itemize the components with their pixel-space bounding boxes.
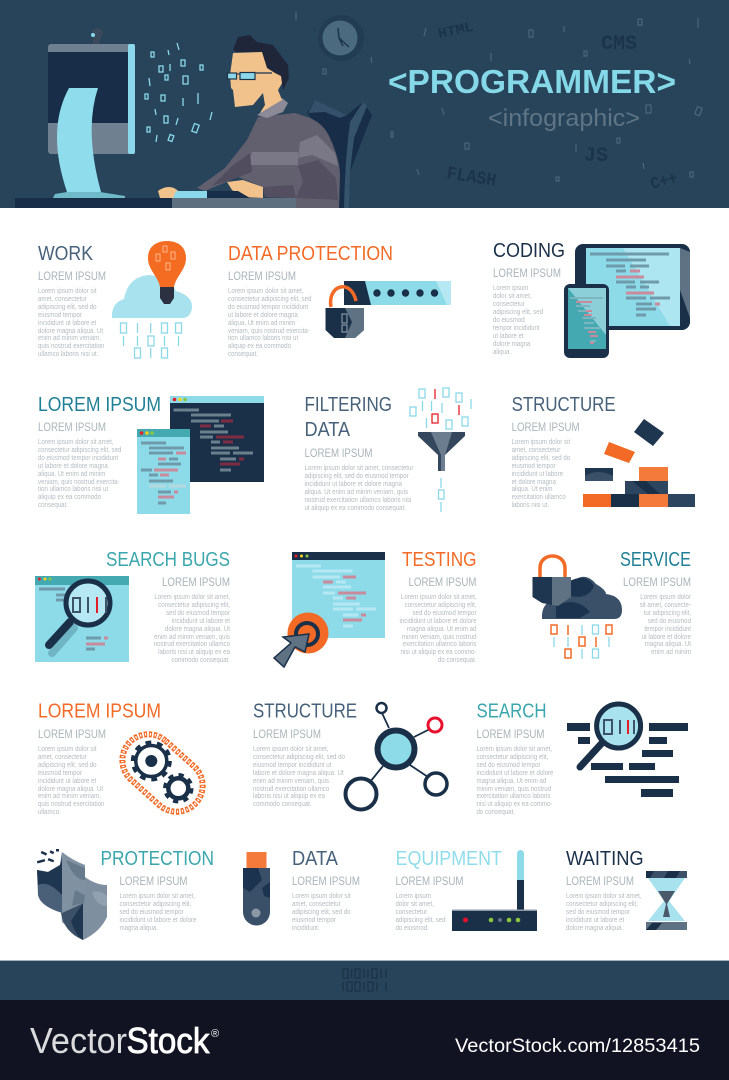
icon: hourglass [646, 871, 687, 930]
icon: usb stick [243, 852, 270, 926]
body text: aliqua. Ut enim ad minim veniam, quis [304, 489, 409, 496]
icon: binary code [343, 969, 386, 991]
body text: incididunt ut labore et dolore magna [304, 481, 402, 488]
body text: laboris nisi ut aliquip ex ea [158, 649, 230, 656]
heading: EQUIPMENT [396, 847, 502, 870]
body text: consectetur adipiscing elit, [405, 602, 477, 609]
body text: Lorem ipsum dolor sit amet, [401, 594, 477, 601]
body text [154, 594, 231, 664]
subheading: LOREM IPSUM [493, 268, 561, 280]
body text: amet, consectetur [38, 754, 87, 761]
body text: laboris nisi ut. [512, 502, 549, 509]
body text: Lorem ipsum dolor [640, 594, 692, 601]
body text [228, 288, 312, 358]
body text: Lorem ipsum dolor sit [292, 893, 351, 900]
body text: incididunt ut labore et [38, 778, 96, 785]
background words: CMS [601, 33, 637, 56]
body text: veniam, quis nostrud exercita- [38, 479, 120, 486]
body text: adipiscing elit, sed do [512, 455, 571, 462]
body text: adipiscing elit, sed do [38, 304, 97, 311]
panel: equipment [396, 847, 537, 932]
icon: tablet [575, 244, 690, 330]
body text: consectetur adipiscing elit, [158, 602, 230, 609]
body text: Lorem ipsum dolor sit amet, [476, 746, 552, 753]
body text: do consequat. [476, 809, 515, 816]
body text: ullamco. [38, 809, 61, 816]
illustration: programmer [158, 35, 340, 208]
body text: et dolore magna [512, 479, 556, 486]
body text: Lorem ipsum dolor sit amet, [566, 893, 642, 900]
body text: consequat. [228, 351, 258, 358]
body text: incididunt ut labore et dolore [400, 618, 477, 625]
panel: filtering data [304, 388, 471, 512]
icon: magnifier over code bars [567, 704, 688, 797]
subheading: LOREM IPSUM [38, 271, 106, 283]
title: <PROGRAMMER> [388, 63, 676, 100]
image id: VectorStock.com/12853415 [455, 1036, 700, 1057]
body text: eiusmod tempor [292, 917, 337, 924]
body text: minim veniam, quis nostrud [402, 634, 477, 641]
subheading: LOREM IPSUM [120, 876, 188, 888]
panel: structure network [253, 700, 447, 810]
body text: consequat. [38, 502, 68, 509]
body text: exercitation ullamco laboris [403, 641, 477, 648]
icon: magnifier on window [35, 576, 129, 662]
body text: aliqua. Ut enim ad minim [38, 471, 105, 478]
body text [253, 746, 345, 808]
heading: TESTING [402, 548, 476, 571]
body text: labore et dolore magna aliqua. Ut [253, 770, 344, 777]
body text: incididunt ut labore et [38, 320, 96, 327]
body text [304, 465, 414, 512]
body text: aliqua. Ut enim [512, 486, 552, 493]
hair [233, 35, 289, 90]
body text: eiusmod tempor incididunt ut [253, 762, 331, 769]
body text: adipiscing elit, sed [396, 917, 446, 924]
body text: sit amet, consecte- [640, 602, 691, 609]
body text: sed do eiusmod tempor [166, 610, 231, 617]
subheading: LOREM IPSUM [38, 729, 106, 741]
heading: DATA PROTECTION [228, 242, 393, 265]
panel: data [243, 847, 360, 932]
body text: Lorem ipsum dolor sit amet, [253, 746, 329, 753]
illustration: desk [15, 198, 296, 208]
body text: consectetur [493, 301, 525, 308]
hands and keyboard [158, 187, 180, 198]
body text [120, 893, 197, 932]
subtitle: <infographic> [488, 105, 640, 132]
body text: sed do eiusmod tempor [476, 762, 541, 769]
body text: exercitation ullamco [512, 494, 566, 501]
background words: JS [584, 145, 608, 168]
body text: nostrud exercitation ullamco [154, 641, 230, 648]
background words: C++ [649, 170, 680, 195]
body text: sed do eiusmod tempor [120, 909, 184, 916]
heading: DATA [304, 418, 350, 441]
body text: commodo consequat. [171, 657, 230, 664]
panel: data protection [228, 242, 451, 358]
body text [400, 594, 477, 664]
body text: consectetur adipiscing elit, [476, 754, 549, 761]
body text: quis nostrud exercitation [38, 343, 105, 350]
heading: FILTERING [304, 393, 392, 416]
body text: Lorem ipsum dolor sit amet, [154, 594, 230, 601]
icon: light bulb on cloud [112, 241, 192, 358]
heading: STRUCTURE [512, 393, 616, 416]
body text: sed do eiusmod tempor [412, 610, 477, 617]
body text: enim ad minim veniam, quis [253, 778, 330, 785]
subheading: LOREM IPSUM [396, 876, 464, 888]
body text: tion ullamco laboris nisi ut [38, 486, 108, 493]
body text: Lorem ipsum dolor sit amet, [38, 439, 114, 446]
subheading: LOREM IPSUM [162, 577, 230, 589]
icon: router [452, 850, 537, 931]
body text [640, 594, 692, 656]
body text [38, 746, 105, 816]
body text: aliquip ex ea commodo [38, 494, 101, 501]
icon: dark code window [170, 396, 264, 482]
heading: SERVICE [620, 548, 691, 571]
body text: amet, consectetur [38, 296, 87, 303]
subheading: LOREM IPSUM [408, 577, 476, 589]
body text: incididunt ut labore et dolore [120, 917, 197, 924]
heading: PROTECTION [100, 847, 214, 870]
body text: dolore magna [493, 341, 531, 348]
body text [292, 893, 351, 932]
icon: window with target cursor [274, 552, 385, 667]
body text: do consequat. [438, 657, 477, 664]
body text: consectetur adipiscing elit, sed [228, 296, 312, 303]
panel: work [38, 241, 192, 358]
body text: dolore magna aliqua. Ut [165, 626, 230, 633]
subheading: LOREM IPSUM [623, 577, 691, 589]
body text: Lorem ipsum dolor sit amet, consectetur [304, 465, 414, 472]
body text: exercitation ullamco laboris [476, 793, 551, 800]
body text: enim ad minim [651, 649, 691, 656]
body text: amet, consectetur [292, 901, 341, 908]
body text: consectetur adipiscing elit, sed do [253, 754, 345, 761]
body text [396, 893, 446, 932]
body text: eiusmod tempor [512, 463, 556, 470]
illustration: monitor [48, 28, 135, 198]
bottom band [0, 960, 729, 1000]
logo: Stock [126, 1020, 210, 1061]
subheading: LOREM IPSUM [38, 422, 106, 434]
panel: search bugs [35, 548, 231, 664]
body text [566, 893, 642, 932]
heading: CODING [493, 239, 565, 262]
body text: veniam, quis nostrud exercita- [228, 328, 310, 335]
body text: nisi ut aliquip ex ea commo- [476, 801, 552, 808]
body text: nisi ut aliquip ex ea commo- [401, 649, 476, 656]
body text: adipiscing elit, sed [493, 309, 543, 316]
body text: nostrud exercitation ullamco laboris nisi [304, 497, 412, 504]
panel: structure bricks [512, 393, 695, 509]
icon: light code window [137, 429, 190, 514]
heading: WORK [38, 242, 93, 265]
illustration: floating bits [145, 43, 212, 142]
icon: bricks [583, 419, 695, 507]
subheading: LOREM IPSUM [566, 876, 634, 888]
heading: SEARCH BUGS [106, 548, 230, 571]
body text: quis nostrud exercitation [38, 801, 105, 808]
panel: service [532, 548, 692, 659]
body text: Lorem ipsum dolor sit [512, 439, 570, 446]
body text: ut labore et dolore magna [38, 463, 108, 470]
footer [0, 1000, 729, 1080]
body text: enim ad minim veniam, [38, 335, 101, 342]
body text: tur adipiscing elit, [644, 610, 691, 617]
body text [38, 439, 122, 509]
body text [512, 439, 571, 509]
hero banner [0, 0, 729, 208]
body text: do eiusmod [493, 317, 525, 324]
body text: tion ullamco laboris nisi ut [228, 335, 298, 342]
heading: LOREM IPSUM [38, 700, 161, 722]
body text: tempor incididunt [493, 325, 540, 332]
body text: do eiusmod tempor incididunt [228, 304, 308, 311]
body text: incididunt ut labore et dolore [476, 770, 554, 777]
illustration: chair [307, 100, 372, 208]
body text: minim veniam, quis nostrud [476, 786, 551, 793]
body text: Lorem ipsum [493, 285, 528, 292]
body text: magna aliqua. Ut enim ad [407, 626, 477, 633]
panel: testing [274, 548, 477, 667]
glasses [228, 72, 272, 80]
body text: adipiscing elit, sed do [38, 762, 97, 769]
body text: sed do eiusmod tempor [566, 909, 631, 916]
background words: FLASH [445, 164, 498, 192]
panel: waiting [566, 847, 687, 932]
face [230, 52, 284, 113]
body text: ullamco laboris nisi ut. [38, 351, 98, 358]
body text: dolore magna aliqua. Ut [38, 328, 103, 335]
subheading: LOREM IPSUM [292, 876, 360, 888]
body text: adipiscing elit, sed do eiusmod tempor [304, 473, 409, 480]
body text: ut labore et dolore [642, 634, 691, 641]
body text: dolore magna aliqua. [566, 925, 623, 932]
body text: Lorem ipsum [396, 893, 431, 900]
panel: search [476, 700, 688, 816]
body text: consectetur adipiscing elit, [120, 901, 192, 908]
logo [30, 1020, 219, 1061]
icon: shields [37, 849, 107, 940]
body text: aliqua. Ut enim ad minim [228, 320, 295, 327]
subheading: LOREM IPSUM [228, 271, 296, 283]
body text: aliqua. [493, 349, 511, 356]
body text: Lorem ipsum dolor sit [38, 746, 97, 753]
panel: lorem ipsum gears [38, 700, 213, 822]
body text: tempor incididunt [644, 626, 691, 633]
icon: password and padlock [326, 281, 451, 338]
body text: magna aliqua. [120, 925, 158, 932]
body text: laboris nisi ut aliquip ex ea [253, 793, 325, 800]
body text: dolor sit amet, [396, 901, 434, 908]
icon: locked cloud [532, 556, 622, 659]
body text: enim ad minim veniam, quis [154, 634, 231, 641]
body text [476, 746, 554, 816]
body text: aliquip ex ea commodo [228, 343, 291, 350]
body text: magna aliqua. Ut [645, 641, 691, 648]
body text: commodo consequat. [253, 801, 312, 808]
body text: amet, consectetur [512, 447, 561, 454]
collar [257, 98, 288, 118]
body text: Lorem ipsum dolor sit amet, [228, 288, 304, 295]
heading: SEARCH [476, 700, 546, 722]
body text: ut labore et [493, 333, 524, 340]
body text: consectetur [396, 909, 428, 916]
panel: coding [493, 239, 690, 358]
body text: Lorem ipsum dolor sit [38, 288, 97, 295]
body text: eiusmod tempor [38, 312, 83, 319]
wall clock [318, 15, 364, 61]
body text: do eiusmod tempor incididunt [38, 455, 118, 462]
heading: STRUCTURE [253, 700, 357, 722]
icon: network nodes [346, 703, 447, 810]
body text: magna aliqua. Ut enim ad [476, 778, 547, 785]
body text: eiusmod tempor [38, 770, 83, 777]
heading: WAITING [566, 847, 644, 870]
panel: protection [37, 847, 214, 940]
body text [38, 288, 105, 358]
body text [493, 285, 543, 356]
body text: incididunt ut labore et [566, 917, 624, 924]
subheading: LOREM IPSUM [304, 448, 372, 460]
logo: Vector [30, 1020, 127, 1061]
body text: nostrud exercitation ullamco [253, 786, 330, 793]
body text: enim ad minim veniam, [38, 793, 101, 800]
icon: gears in binary ring [112, 724, 213, 822]
heading: DATA [292, 847, 338, 870]
body text: incididunt ut labore et [172, 618, 230, 625]
subheading: LOREM IPSUM [476, 729, 544, 741]
panel: lorem ipsum windows [38, 393, 264, 514]
body text: ut aliquip ex ea commodo consequat. [304, 505, 406, 512]
body text: dolor sit amet, [493, 293, 532, 300]
background bits [296, 12, 702, 181]
icon: phone [564, 284, 609, 358]
background words [437, 20, 680, 195]
body text: do eiusmod. [396, 925, 429, 932]
body text: consectetur adipiscing elit, [566, 901, 638, 908]
body text: Lorem ipsum dolor sit amet, [120, 893, 195, 900]
body text: adipiscing elit, sed do [292, 909, 351, 916]
logo: ® [211, 1028, 219, 1040]
subheading: LOREM IPSUM [253, 729, 321, 741]
body text: sed do eiusmod [648, 618, 691, 625]
icon: funnel with bits [410, 388, 471, 512]
background words: HTML [437, 20, 475, 43]
body text: ut labore et dolore magna [228, 312, 298, 319]
body text: consectetur adipiscing elit, sed [38, 447, 122, 454]
sweater [197, 113, 340, 208]
subheading: LOREM IPSUM [512, 422, 580, 434]
body text: incididunt ut labore [512, 471, 563, 478]
body text: dolore magna aliqua. Ut [38, 786, 103, 793]
heading: LOREM IPSUM [38, 393, 161, 416]
body text: incididunt. [292, 925, 320, 932]
heading [304, 393, 392, 441]
